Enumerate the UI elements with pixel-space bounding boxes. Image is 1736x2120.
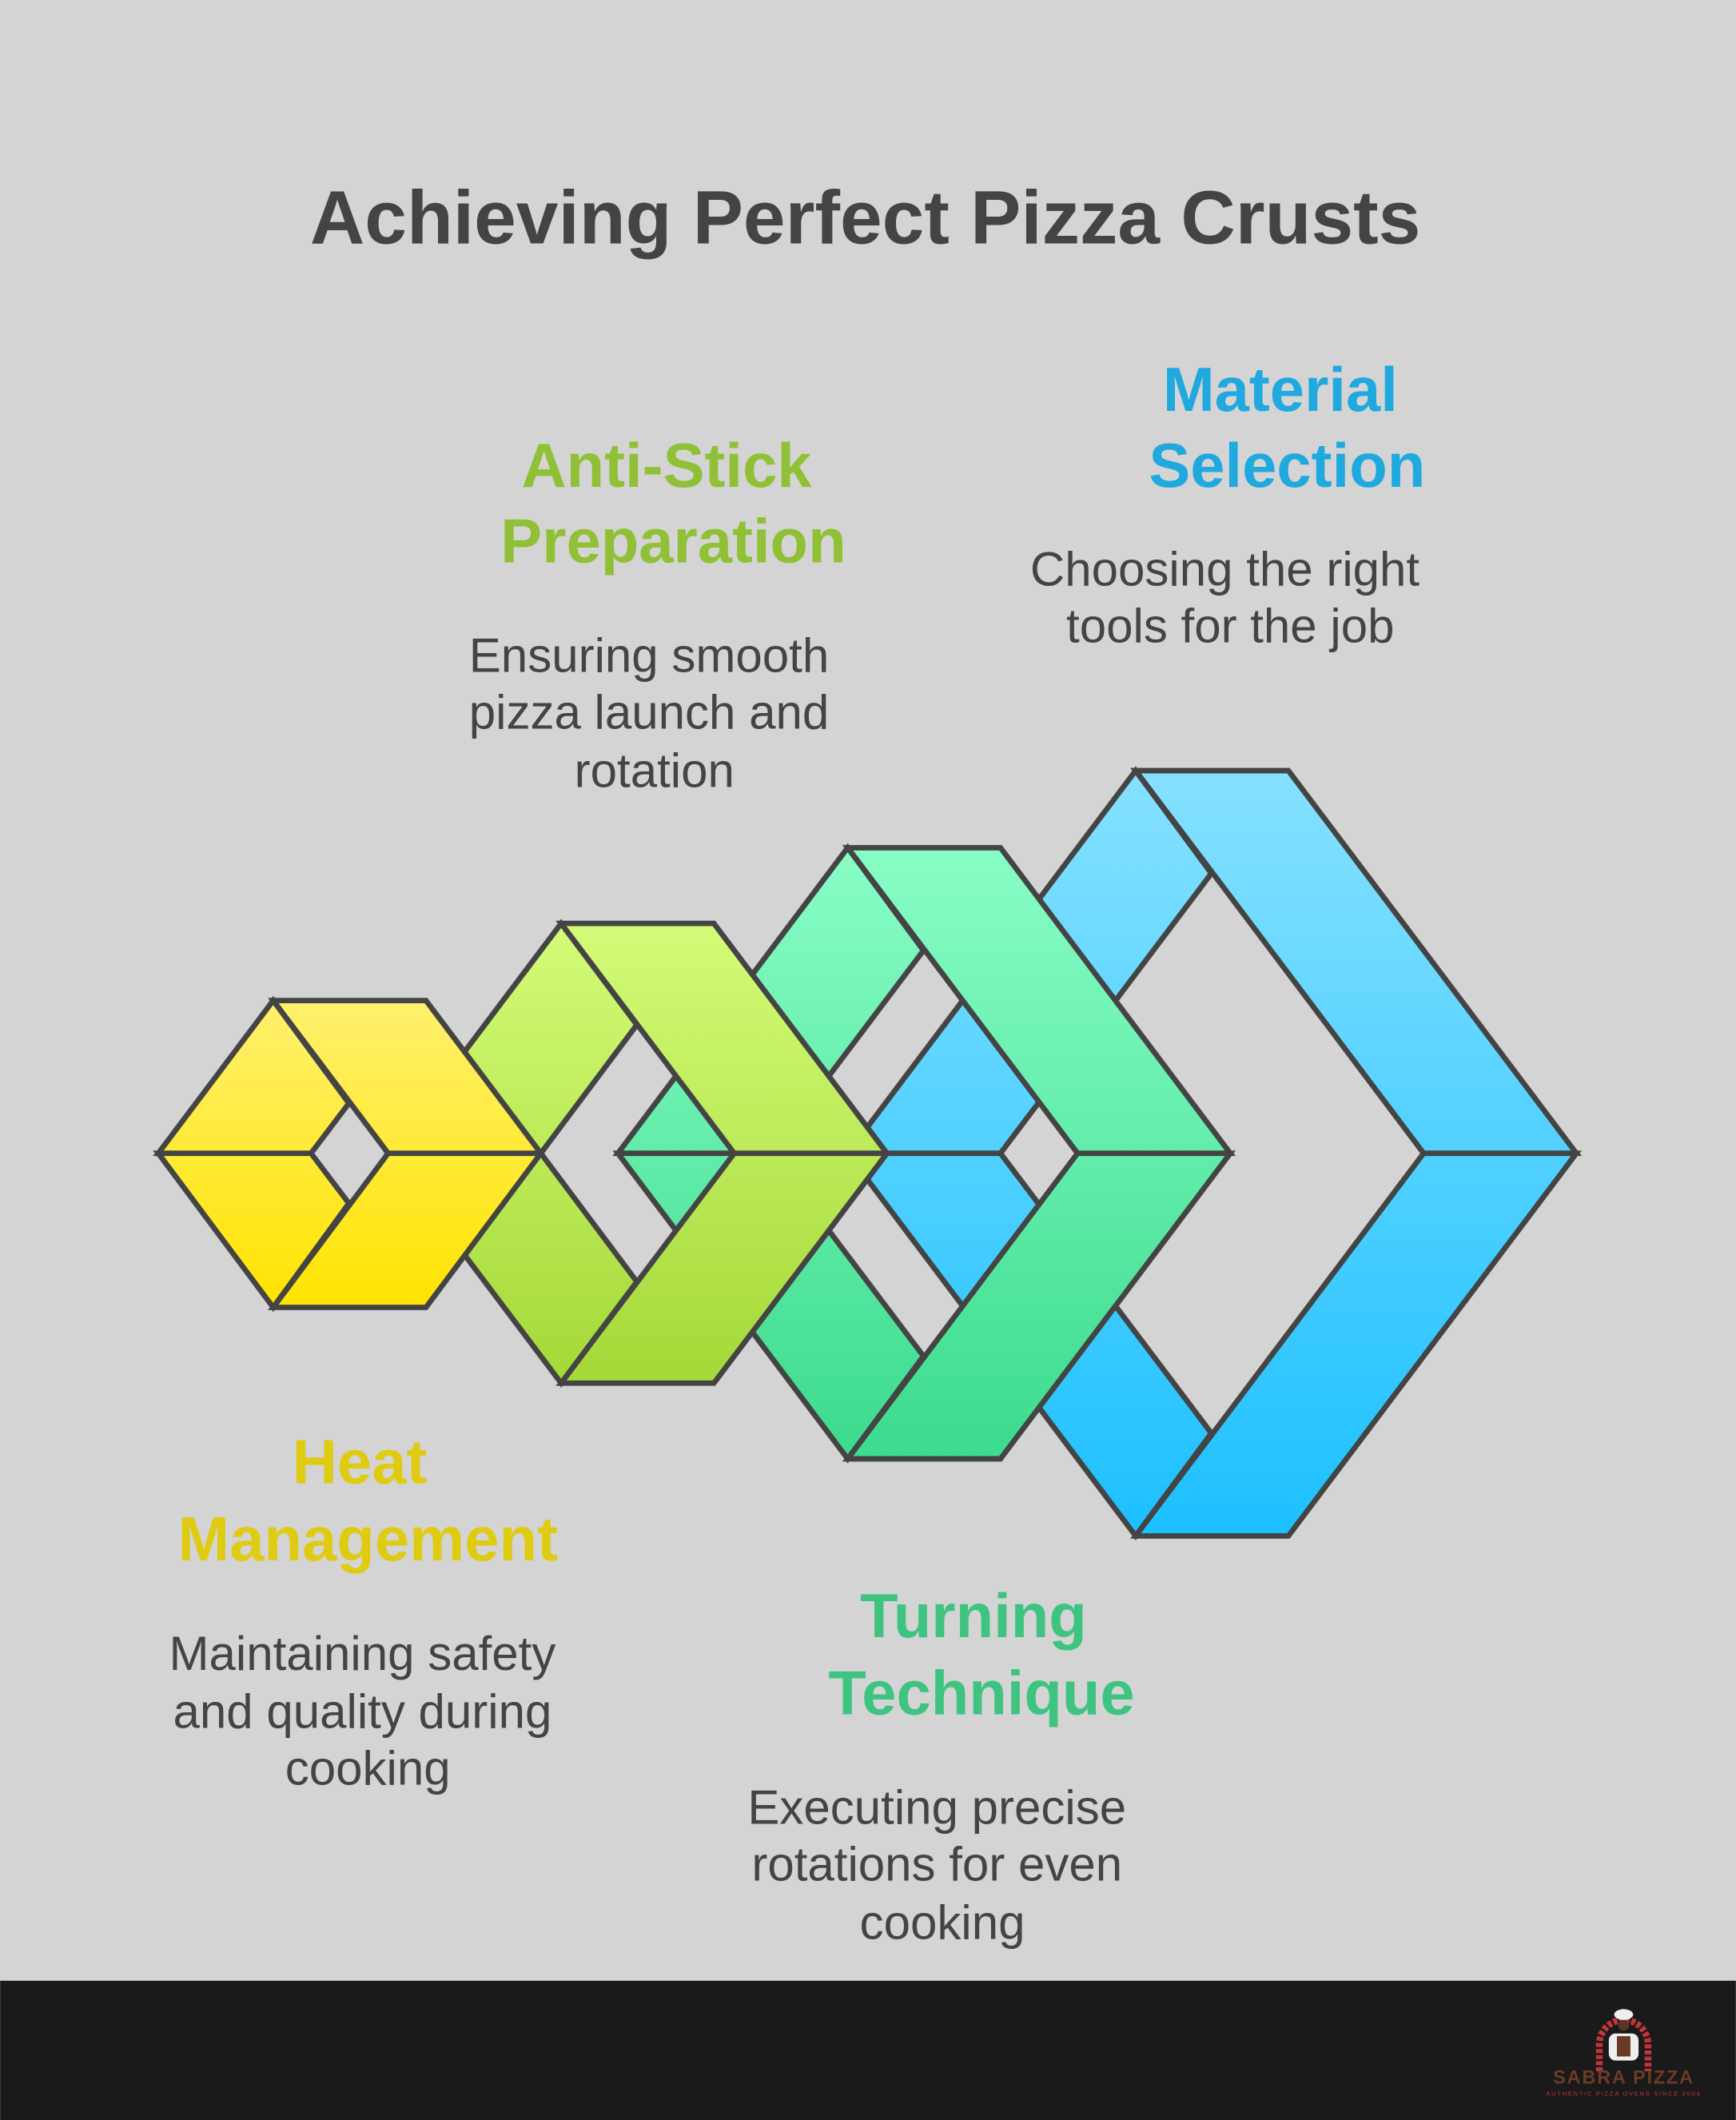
label: heat management: and quality during <box>173 1685 551 1739</box>
title: Achieving Perfect Pizza Crusts <box>310 175 1420 260</box>
footer bar <box>0 1981 1736 2120</box>
label: heat management: cooking <box>285 1742 451 1795</box>
label: material selection: tools for the job <box>1066 599 1395 652</box>
label: anti-stick preparation <box>469 432 846 797</box>
label: anti-stick preparation: Anti-Stick <box>521 432 812 500</box>
logo: sabra pizza: SABRA PIZZA <box>1553 2067 1694 2088</box>
label: material selection: Selection <box>1149 432 1425 500</box>
label: turning technique: Turning <box>860 1582 1087 1651</box>
label: turning technique: Technique <box>828 1660 1135 1728</box>
label: anti-stick preparation: rotation <box>575 743 735 797</box>
label: turning technique <box>747 1582 1135 1949</box>
label: heat management: Heat <box>293 1428 427 1496</box>
shape: anti-stick preparation (lime) <box>388 923 887 1383</box>
shape: material selection (blue) <box>848 771 1576 1536</box>
label: heat management: Maintaining safety <box>169 1627 555 1680</box>
label: material selection: Choosing the right <box>1030 542 1419 596</box>
shape: turning technique (green) <box>618 847 1230 1459</box>
label: heat management: Management <box>177 1505 558 1574</box>
label: anti-stick preparation: Ensuring smooth <box>469 629 829 683</box>
label: material selection: Material <box>1163 356 1398 424</box>
label: material selection <box>1030 356 1425 652</box>
logo: sabra pizza <box>1546 2009 1701 2098</box>
shape: heat management (yellow) <box>158 1001 541 1308</box>
label: anti-stick preparation: Preparation <box>500 508 846 576</box>
label: turning technique: rotations for even <box>751 1838 1122 1891</box>
label: anti-stick preparation: pizza launch and <box>469 686 829 739</box>
label: heat management <box>169 1428 558 1795</box>
logo: sabra pizza: AUTHENTIC PIZZA OVENS SINCE 2004 <box>1546 2090 1701 2098</box>
label: turning technique: Executing precise <box>747 1781 1126 1835</box>
label: turning technique: cooking <box>860 1895 1025 1949</box>
